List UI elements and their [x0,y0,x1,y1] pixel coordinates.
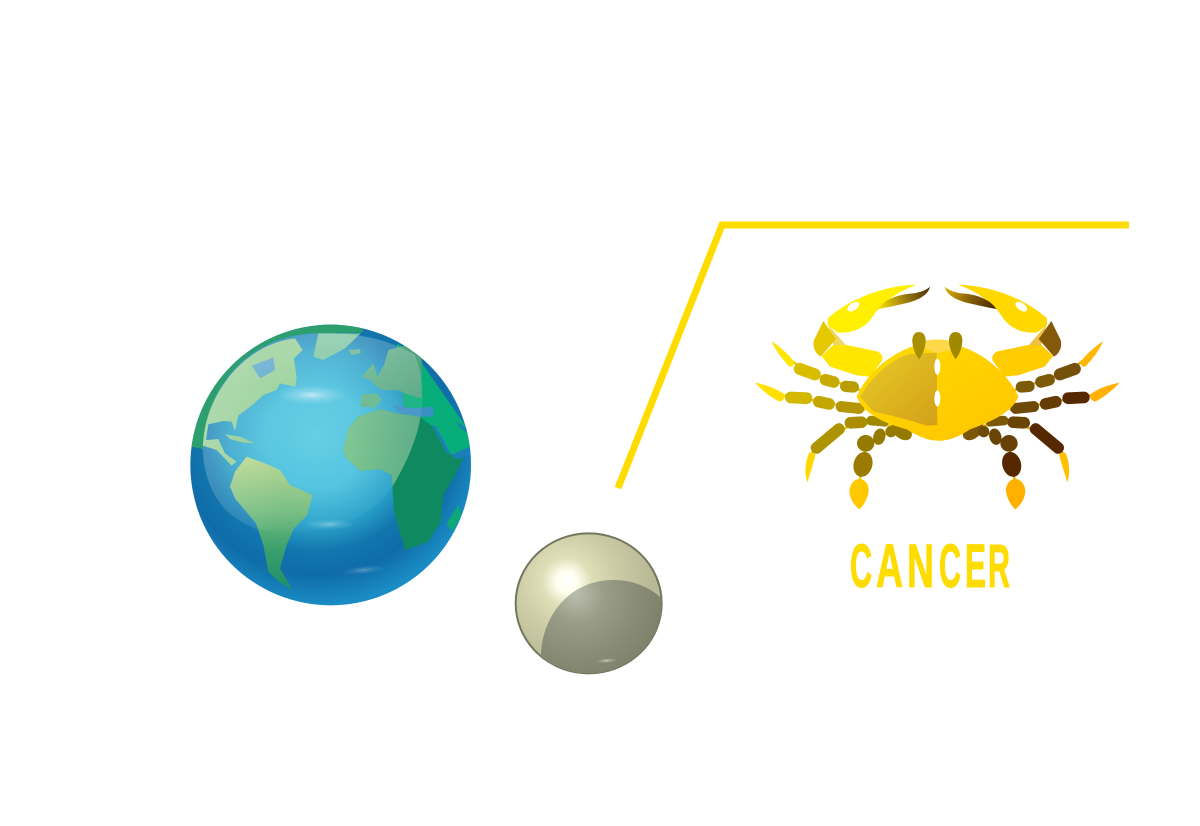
Africa and Arabia, dark side [343,409,464,550]
Persian Gulf [456,421,467,432]
right rim land [396,344,470,454]
Iberia [361,393,382,408]
South America [230,457,312,590]
moon glint [598,658,616,663]
Hudson Bay [252,358,275,378]
North America [203,338,303,466]
specular glints [277,386,385,577]
label: CANCER: C [939,532,961,600]
pointer line [618,225,1129,488]
crab left claw [814,285,930,377]
Africa, lit side [343,409,420,486]
icon: earth globe [187,322,480,605]
label: CANCER: A [876,532,903,600]
Mediterranean [393,405,433,417]
left rim land [187,322,363,449]
continents [203,333,464,590]
Cuba [225,434,255,443]
icon: yellow crab [755,285,1120,509]
label: CANCER: C [850,532,872,600]
glass highlight [203,333,422,532]
Gulf of Aden water [451,447,473,459]
label: CANCER: E [965,532,986,600]
Iceland [348,349,361,355]
crab right claw [945,285,1061,377]
Europe [362,345,422,398]
label: CANCER: N [907,532,934,600]
crab left legs [755,341,916,509]
text: R [988,532,1010,600]
crab shell [857,332,1018,441]
Madagascar [447,505,462,532]
Red Sea [432,424,451,453]
crab right legs [959,341,1120,509]
icon: moon [516,533,665,680]
Greenland [313,333,361,360]
moon shadow [541,580,665,680]
left glass shine [202,358,258,528]
